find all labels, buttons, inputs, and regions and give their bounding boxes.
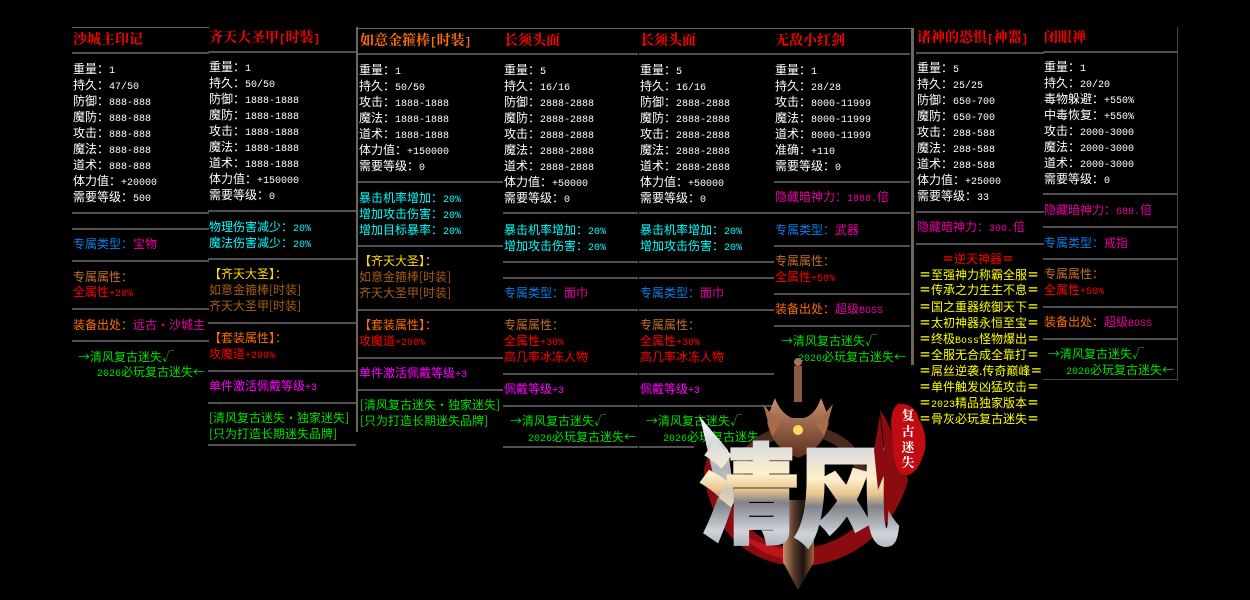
panel: 如意金箍棒: 增加攻击伤害：20% — [359, 205, 461, 222]
panel: 如意金箍棒: 攻击：1888-1888 — [359, 93, 449, 110]
title: 如意金箍棒[时装] — [360, 30, 471, 50]
seal: 复古迷失 — [874, 404, 926, 490]
logo title: 风 — [793, 414, 899, 568]
type: 专属类型：戒指 — [1044, 234, 1128, 251]
damage reduction: 物理伤害减少：20% — [209, 218, 311, 235]
panel: 齐天大圣甲: 攻魔道+200% — [209, 345, 275, 362]
panel: 沙城主印记: 需要等级：500 — [73, 188, 151, 205]
frame: top rule centre — [357, 28, 912, 29]
panel: 闭眼禅: 持久：20/20 — [1044, 74, 1110, 91]
panel: 诸神的恐惧: ＝国之重器统御天下＝ — [919, 298, 1039, 315]
panel: 诸神的恐惧: 魔法：288-588 — [917, 139, 995, 156]
crit bonuses: 暴击机率增加：20% — [504, 221, 606, 238]
panel: 长须头面 two: 体力值：+50000 — [640, 173, 724, 190]
panel: 齐天大圣甲: 魔法伤害减少：20% — [209, 234, 311, 251]
panel: 闭眼禅 — [1043, 27, 1177, 380]
attribute: 专属属性： — [504, 316, 564, 333]
source: 装备出处：超级BOSS — [1044, 313, 1152, 330]
title: 诸神的恐惧[神器] — [917, 27, 1028, 47]
panel: 齐天大圣甲: [只为打造长期迷失品牌] — [209, 425, 337, 442]
panel: 闭眼禅: 中毒恢复：+550% — [1044, 106, 1134, 123]
sword blade — [783, 500, 814, 590]
panel: 长须头面 two: 高几率冰冻人物 — [640, 348, 724, 365]
set members: 【齐天大圣】： — [359, 252, 437, 269]
panel: 无敌小红剑: 准确：+110 — [775, 141, 835, 158]
title: 长须头面 — [640, 30, 696, 50]
panel: 长须头面 two: 需要等级：0 — [640, 189, 706, 206]
source: 装备出处：超级BOSS — [775, 300, 883, 317]
stats: 重量：5 — [504, 61, 546, 78]
seal: 复古迷失: 复 — [901, 405, 915, 424]
panel: 长须头面 one: 防御：2888-2888 — [504, 93, 594, 110]
stats: 重量：1 — [1044, 58, 1086, 75]
frame: vertical bar left — [356, 27, 358, 432]
stats: 重量：1 — [73, 60, 115, 77]
panel: 长须头面 one: 道术：2888-2888 — [504, 157, 594, 174]
panel: 长须头面 two: 全属性+30% — [640, 332, 700, 349]
black backing — [748, 420, 848, 520]
panel: 闭眼禅: 道术：2000-3000 — [1044, 154, 1134, 171]
slogan: [清风复古迷失・独家迷失] — [209, 409, 349, 426]
panel: 长须头面 one: 需要等级：0 — [504, 189, 570, 206]
panel: 无敌小红剑: 2026必玩复古迷失← — [798, 348, 906, 365]
panel: 长须头面 one: 魔防：2888-2888 — [504, 109, 594, 126]
panel: 诸神的恐惧: 魔防：650-700 — [917, 107, 995, 124]
seal: 复古迷失: 古 — [901, 421, 915, 440]
panel: 诸神的恐惧 — [916, 27, 1044, 427]
panel: 闭眼禅: 魔法：2000-3000 — [1044, 138, 1134, 155]
slogan: [清风复古迷失・独家迷失] — [360, 396, 500, 413]
attribute: 专属属性： — [775, 252, 835, 269]
panel: 沙城主印记: 防御：888-888 — [73, 92, 151, 109]
panel: 无敌小红剑: 道术：8000-11999 — [775, 125, 871, 142]
panel: 长须头面 one: 2026必玩复古迷失← — [528, 428, 636, 445]
panel: 长须头面 two: 增加攻击伤害：20% — [640, 237, 742, 254]
panel: 长须头面 one — [503, 30, 638, 448]
panel: 诸神的恐惧: 防御：650-700 — [917, 91, 995, 108]
panel: 沙城主印记: 攻击：888-888 — [73, 124, 151, 141]
stats: 重量：5 — [640, 61, 682, 78]
panel: 长须头面 two: 持久：16/16 — [640, 77, 706, 94]
panel: 如意金箍棒: 道术：1888-1888 — [359, 125, 449, 142]
hidden power: 隐藏暗神力：688.倍 — [1044, 201, 1152, 218]
type: 专属类型：宝物 — [73, 235, 157, 252]
stats: 重量：1 — [209, 58, 251, 75]
attribute: 专属属性： — [640, 316, 700, 333]
panel: 齐天大圣甲: 攻击：1888-1888 — [209, 122, 299, 139]
panel: 如意金箍棒: 体力值：+150000 — [359, 141, 449, 158]
set members: 【齐天大圣】： — [209, 265, 287, 282]
frame: right border of last panel — [1177, 27, 1178, 381]
title: 沙城主印记 — [73, 29, 143, 49]
panel: 沙城主印记: 持久：47/50 — [73, 76, 139, 93]
panel: 长须头面 one: 增加攻击伤害：20% — [504, 237, 606, 254]
title: 无敌小红剑 — [775, 30, 845, 50]
panel: 沙城主印记: 魔防：888-888 — [73, 108, 151, 125]
panel: 诸神的恐惧: ＝终极Boss怪物爆出＝ — [919, 330, 1039, 347]
source: 装备出处：远古・沙城主 — [73, 316, 205, 333]
level note: 单件激活佩戴等级+3 — [359, 364, 467, 381]
panel: 如意金箍棒: 如意金箍棒[时装] — [359, 268, 451, 285]
hidden power: 隐藏暗神力：1888.倍 — [775, 188, 889, 205]
stats: 重量：1 — [359, 61, 401, 78]
panel: 如意金箍棒: 攻魔道+200% — [359, 332, 425, 349]
panel: 沙城主印记: 2026必玩复古迷失← — [97, 363, 205, 380]
panel: 齐天大圣甲: 齐天大圣甲[时装] — [209, 297, 301, 314]
spike of the 清 stroke — [700, 417, 735, 520]
panel: 诸神的恐惧: ＝传承之力生生不息＝ — [919, 281, 1039, 298]
panel: 闭眼禅: 攻击：2000-3000 — [1044, 122, 1134, 139]
title: 闭眼禅 — [1044, 27, 1086, 47]
panel: 齐天大圣甲: 体力值：+150000 — [209, 170, 299, 187]
panel: 长须头面 one: 攻击：2888-2888 — [504, 125, 594, 142]
hidden power: 隐藏暗神力：300.倍 — [917, 218, 1025, 235]
crit bonuses: 暴击机率增加：20% — [359, 189, 461, 206]
slogan: →清风复古迷失√ — [646, 412, 742, 429]
panel: 无敌小红剑: 全属性+50% — [775, 268, 835, 285]
panel: 如意金箍棒: 齐天大圣甲[时装] — [359, 284, 451, 301]
artifact list: ＝逆天神器＝ — [942, 250, 1014, 267]
panel: 如意金箍棒: [只为打造长期迷失品牌] — [360, 412, 488, 429]
panel: 诸神的恐惧: ＝单件触发凶猛攻击＝ — [919, 378, 1039, 395]
panel: 闭眼禅: 需要等级：0 — [1044, 170, 1110, 187]
panel: 无敌小红剑: 持久：28/28 — [775, 77, 841, 94]
set attribute: 【套装属性】： — [359, 316, 437, 333]
panel: 诸神的恐惧: 道术：288-588 — [917, 155, 995, 172]
frame: vertical bar right — [911, 28, 914, 365]
panel: 齐天大圣甲: 道术：1888-1888 — [209, 154, 299, 171]
panel: 如意金箍棒: 魔法：1888-1888 — [359, 109, 449, 126]
panel: 长须头面 two — [639, 30, 774, 448]
panel: 诸神的恐惧: 攻击：288-588 — [917, 123, 995, 140]
panel: 齐天大圣甲: 防御：1888-1888 — [209, 90, 299, 107]
panel: 长须头面 two: 魔防：2888-2888 — [640, 109, 730, 126]
blood ring — [704, 410, 908, 566]
bronze ring — [738, 430, 862, 480]
panel: 无敌小红剑 — [774, 30, 910, 365]
panel: 长须头面 one: 魔法：2888-2888 — [504, 141, 594, 158]
panel: 长须头面 one: 体力值：+50000 — [504, 173, 588, 190]
slogan: →清风复古迷失√ — [1048, 345, 1144, 362]
level note: 佩戴等级+3 — [640, 380, 700, 397]
panel: 无敌小红剑: 需要等级：0 — [775, 157, 841, 174]
panel: 齐天大圣甲: 需要等级：0 — [209, 186, 275, 203]
panel: 如意金箍棒: 需要等级：0 — [359, 157, 425, 174]
logo: 清风 sword emblem — [699, 358, 926, 590]
type: 专属类型：面巾 — [504, 284, 588, 301]
panel: 齐天大圣甲: 如意金箍棒[时装] — [209, 281, 301, 298]
frame: top rule left — [72, 27, 209, 28]
panel: 诸神的恐惧: ＝至强神力称霸全服＝ — [919, 266, 1039, 283]
panel: 齐天大圣甲: 持久：50/50 — [209, 74, 275, 91]
level note: 单件激活佩戴等级+3 — [209, 377, 317, 394]
panel: 诸神的恐惧: ＝屌丝逆袭.传奇巅峰＝ — [919, 362, 1042, 379]
slogan: →清风复古迷失√ — [510, 412, 606, 429]
panel: 沙城主印记: 魔法：888-888 — [73, 140, 151, 157]
panel: 闭眼禅: 全属性+50% — [1044, 281, 1104, 298]
slogan: →清风复古迷失√ — [781, 332, 877, 349]
panel: 齐天大圣甲: 魔防：1888-1888 — [209, 106, 299, 123]
attribute: 专属属性： — [73, 268, 133, 285]
panel: 长须头面 two: 道术：2888-2888 — [640, 157, 730, 174]
panel: 齐天大圣甲: 魔法：1888-1888 — [209, 138, 299, 155]
panel: 沙城主印记: 体力值：+20000 — [73, 172, 157, 189]
level note: 佩戴等级+3 — [504, 380, 564, 397]
panel: 如意金箍棒: 增加目标暴率：20% — [359, 221, 461, 238]
set attribute: 【套装属性】： — [209, 329, 287, 346]
panel: 诸神的恐惧: ＝全服无合成全靠打＝ — [919, 346, 1039, 363]
panel: 诸神的恐惧: 持久：25/25 — [917, 75, 983, 92]
slogan: →清风复古迷失√ — [78, 348, 174, 365]
panel: 长须头面 two: 防御：2888-2888 — [640, 93, 730, 110]
panel: 长须头面 one: 全属性+30% — [504, 332, 564, 349]
panel: 如意金箍棒 — [358, 30, 503, 429]
panel: 诸神的恐惧: ＝2023精品独家版本＝ — [919, 394, 1039, 411]
attribute: 专属属性： — [1044, 265, 1104, 282]
panel: 沙城主印记: 道术：888-888 — [73, 156, 151, 173]
logo title: 清 — [699, 408, 799, 565]
type: 专属类型：武器 — [775, 221, 859, 238]
stats: 重量：1 — [775, 61, 817, 78]
panel: 闭眼禅: 毒物躲避：+550% — [1044, 90, 1134, 107]
panel: 诸神的恐惧: ＝太初神器永恒至宝＝ — [919, 314, 1039, 331]
panel: 闭眼禅: 2026必玩复古迷失← — [1066, 361, 1174, 378]
panel: 长须头面 two: 魔法：2888-2888 — [640, 141, 730, 158]
panel: 长须头面 two: 2026必玩复古迷失← — [663, 428, 771, 445]
panel: 无敌小红剑: 魔法：8000-11999 — [775, 109, 871, 126]
type: 专属类型：面巾 — [640, 284, 724, 301]
panel: 沙城主印记 — [72, 29, 209, 380]
seal: 复古迷失: 迷 — [901, 437, 915, 456]
panel: 长须头面 two: 攻击：2888-2888 — [640, 125, 730, 142]
panel: 长须头面 one: 持久：16/16 — [504, 77, 570, 94]
title: 齐天大圣甲[时装] — [209, 27, 320, 47]
crit bonuses: 暴击机率增加：20% — [640, 221, 742, 238]
panel: 如意金箍棒: 持久：50/50 — [359, 77, 425, 94]
panel: 诸神的恐惧: 需要等级：33 — [917, 187, 989, 204]
sword guard and pommel — [763, 358, 833, 458]
stats: 重量：5 — [917, 59, 959, 76]
panel: 无敌小红剑: 攻击：8000-11999 — [775, 93, 871, 110]
panel: 沙城主印记: 全属性+20% — [73, 283, 133, 300]
panel: 诸神的恐惧: 体力值：+25000 — [917, 171, 1001, 188]
title: 长须头面 — [504, 30, 560, 50]
logo title — [699, 408, 899, 568]
panel: 长须头面 one: 高几率冰冻人物 — [504, 348, 588, 365]
panel: 齐天大圣甲 — [208, 27, 356, 446]
panel: 诸神的恐惧: ＝骨灰必玩复古迷失＝ — [919, 410, 1039, 427]
seal: 复古迷失: 失 — [901, 452, 915, 471]
